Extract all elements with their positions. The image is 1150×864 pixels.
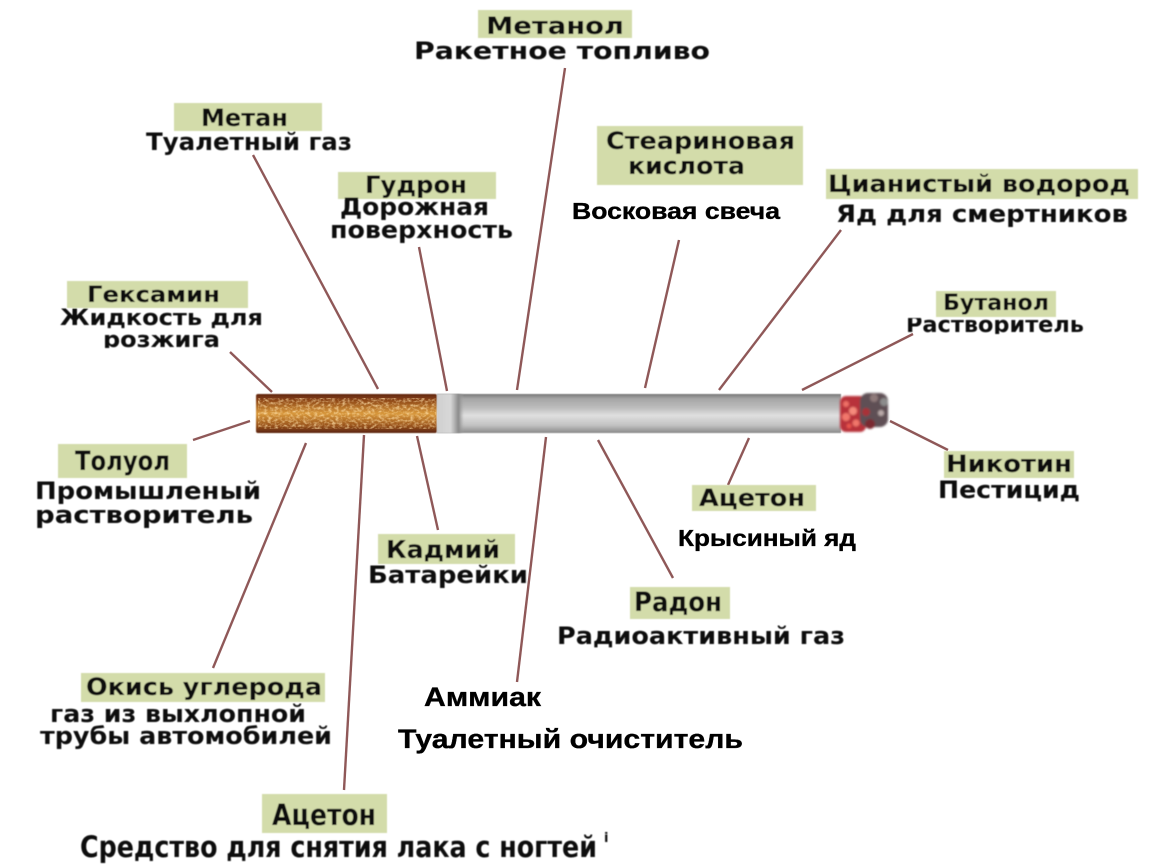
label: Окись углерода: газ из выхлопной — [50, 700, 306, 728]
label: Гудрон: Гудрон — [365, 171, 467, 199]
label: Бутанол — [906, 291, 1084, 338]
label: Кадмий: Кадмий — [386, 535, 500, 564]
label: Толуол — [35, 444, 261, 529]
label: Цианистый водород: Яд для смертников — [836, 200, 1128, 228]
label: Кадмий: Батарейки — [368, 561, 528, 589]
text: Аммиак: Аммиак — [424, 682, 542, 712]
label: Окись углерода — [40, 673, 332, 750]
label: Гексамин: Гексамин — [87, 283, 220, 308]
label: Окись углерода: трубы автомобилей — [40, 722, 332, 750]
label: Цианистый водород: Цианистый водород — [828, 170, 1130, 198]
label: Стеариновая кислота: кислота — [628, 152, 745, 180]
label: Ацетон (лак): Ацетон — [272, 798, 376, 832]
label: Гудрон — [330, 171, 513, 244]
label: Стеариновая кислота: Стеариновая — [606, 127, 795, 155]
label: Стеариновая кислота — [597, 126, 803, 185]
label: Ацетон (лак) — [80, 794, 608, 864]
label: Ацетон (лак): Средство для снятия лака с ногтей — [80, 830, 597, 864]
label: Метанол: Метанол — [486, 12, 624, 40]
label: Радон — [557, 587, 845, 650]
cigarette paper — [437, 394, 841, 433]
label: Метан: Метан — [201, 104, 288, 132]
label: Гудрон: поверхность — [330, 216, 513, 244]
connector lines — [193, 68, 948, 790]
label: Никотин: Никотин — [946, 450, 1072, 478]
label: Метан: Туалетный газ — [146, 128, 352, 156]
label: Метанол: Ракетное топливо — [414, 37, 710, 65]
text: Крысиный яд: Крысиный яд — [678, 525, 856, 551]
label: Кадмий — [368, 534, 528, 589]
label: Бутанол: Растворитель — [906, 313, 1084, 338]
cigarette filter — [256, 394, 437, 433]
label: Ацетон (крысиный яд): Ацетон — [699, 484, 805, 512]
label: Радон: Радиоактивный газ — [557, 622, 845, 650]
cigarette — [256, 393, 888, 433]
text: Аммиак — [398, 682, 743, 754]
burning ember — [840, 393, 888, 432]
label: Гудрон: Дорожная — [340, 193, 489, 221]
filter joint — [437, 394, 464, 433]
label: Окись углерода: Окись углерода — [86, 673, 322, 701]
label: Метанол — [414, 10, 710, 65]
label: Цианистый водород — [826, 169, 1138, 228]
label: Толуол: Промышленый — [35, 477, 261, 505]
label: Гексамин — [60, 281, 263, 353]
label: Бутанол: Бутанол — [943, 291, 1049, 316]
text: Восковая свеча: Восковая свеча — [572, 198, 780, 224]
label: Ацетон (лак): i — [604, 831, 608, 846]
label: Гексамин: Жидкость для — [60, 306, 263, 331]
label: Толуол: растворитель — [35, 501, 253, 529]
label: Радон: Радон — [634, 587, 722, 618]
label: Никотин: Пестицид — [938, 476, 1080, 504]
label: Метан — [146, 103, 352, 156]
label: Толуол: Толуол — [75, 446, 170, 477]
label: Никотин — [938, 450, 1080, 504]
label: Гексамин: розжига — [103, 328, 220, 353]
text: Аммиак: Туалетный очиститель — [398, 724, 743, 754]
